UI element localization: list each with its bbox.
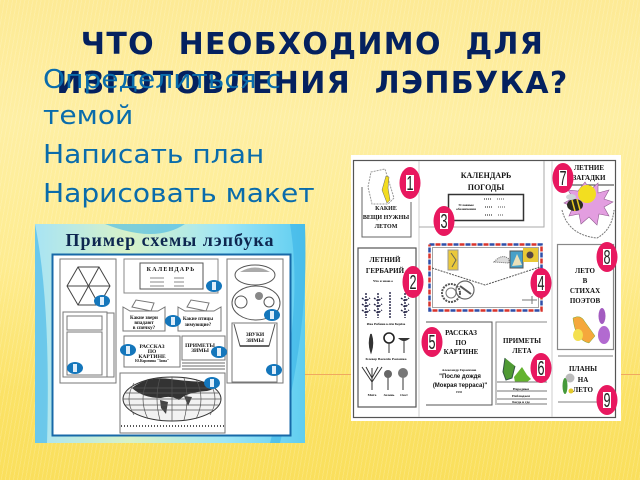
panel: winter signs: ПРИМЕТЫ: [185, 343, 216, 349]
panel: story by picture: (Мокрая терраса)": [433, 383, 487, 389]
number markers: [67, 280, 282, 389]
panel: things needed: ЛЕТОМ: [375, 224, 398, 230]
panel: world map: [120, 373, 225, 433]
panel: signs of summer: Народные: [513, 387, 530, 391]
bullet list: Написать план: [43, 140, 264, 170]
number badges: 2: [410, 272, 416, 294]
panel: summer in verse: ПОЭТОВ: [570, 297, 600, 305]
panel: signs of summer: Наблюдаем: [512, 394, 531, 398]
panel: hexagon and window: [60, 259, 116, 383]
panel: things needed: [362, 169, 411, 237]
bullet list: Определиться с: [43, 65, 281, 95]
panel: pockets: впадают: [134, 321, 154, 326]
panel: pockets: Какие звери: [130, 316, 158, 321]
panel: story: [124, 336, 180, 367]
panel: summer riddles: ЛЕТНИЕ: [574, 164, 604, 172]
panel: herbarium: ГЕРБАРИЙ: [366, 267, 405, 275]
panel: herbarium: Зелень: [384, 393, 395, 397]
panel: story: РАССКАЗ: [139, 344, 165, 350]
panel: story: ПО: [148, 349, 157, 355]
bullet list: темой: [43, 101, 133, 131]
panel: winter signs: ЗИМЫ: [191, 348, 209, 354]
panel: signs of summer: ЛЕТА: [512, 347, 532, 355]
panel: summer plans: ПЛАНЫ: [569, 365, 597, 373]
bullet list: [43, 65, 315, 209]
panel: herbarium: Клевер Василёк Ромашка: [366, 357, 407, 361]
panel: pockets: [123, 300, 221, 331]
panel: story by picture: РАССКАЗ: [445, 329, 477, 337]
panel: weather calendar: [419, 161, 544, 227]
panel: pockets: Какие птицы: [183, 317, 213, 322]
panel: signs of summer: [496, 322, 547, 405]
panel: story by picture: [426, 322, 492, 405]
panel: herbarium: Мята: [368, 393, 377, 397]
panel: snowman and sounds: ЗВУКИ: [246, 332, 265, 338]
number badges: 6: [538, 358, 544, 380]
panel: herbarium: Что я знаю о: [373, 279, 393, 283]
panel: weather calendar: Условные: [458, 203, 474, 207]
panel: signs of summer: Когда и где: [512, 400, 530, 404]
panel: summer plans: НА: [578, 376, 588, 384]
panel: summer plans: ЛЕТО: [573, 386, 594, 394]
panel: story: Ю.Коровина "Зима": [135, 359, 169, 363]
panel: story by picture: 1935: [456, 390, 462, 394]
panel: things needed: ВЕЩИ НУЖНЫ: [363, 215, 409, 221]
number badges: 4: [538, 273, 544, 295]
number badges: 9: [604, 390, 610, 412]
panel: pockets: в спячку?: [133, 326, 156, 331]
panel: story by picture: ПО: [456, 339, 467, 347]
panel: calendar: [124, 259, 218, 293]
panel: things needed: КАКИЕ: [375, 206, 397, 212]
number badges: [400, 163, 618, 415]
panel: herbarium: Осот: [400, 393, 408, 397]
panel: summer riddles: ЗАГАДКИ: [573, 174, 606, 182]
number badges: 5: [428, 332, 436, 354]
panel: summer in verse: В: [583, 277, 588, 285]
panel: snowman and sounds: [227, 259, 283, 383]
heading: scheme example: Пример схемы лэпбука: [66, 230, 274, 250]
panel: envelope: [428, 243, 543, 312]
panel: signs of summer: ПРИМЕТЫ: [503, 337, 541, 345]
panel: weather calendar: обозначения: [456, 207, 476, 211]
bullet list: Нарисовать макет: [43, 179, 315, 209]
panel: summer in verse: СТИХАХ: [570, 287, 600, 295]
panel: story by picture: "После дождя: [439, 374, 481, 380]
number badges: 1: [406, 173, 414, 195]
panel: snowman and sounds: ЗИМЫ: [246, 338, 264, 344]
image: right summer lapbook: [351, 155, 621, 421]
panel: herbarium: [358, 248, 416, 407]
panel: pockets: зимующие?: [185, 323, 212, 328]
panel: summer riddles: [562, 164, 614, 238]
title: ЧТО НЕОБХОДИМО ДЛЯ ИЗГОТОВЛЕНИЯ ЛЭПБУКА?: [56, 27, 569, 101]
scheme sheet: [52, 254, 290, 436]
panel: weather calendar: ПОГОДЫ: [468, 183, 504, 192]
image: left lapbook scheme: [35, 224, 306, 443]
panel: story: КАРТИНЕ: [138, 354, 166, 360]
panel: winter signs: [182, 336, 225, 369]
panel: summer in verse: [558, 244, 614, 350]
panel: summer in verse: ЛЕТО: [575, 267, 596, 275]
number badges: 3: [440, 211, 448, 233]
panel: weather calendar: КАЛЕНДАРЬ: [461, 171, 511, 180]
number badges: 8: [604, 247, 610, 269]
panel: summer plans: [558, 356, 613, 402]
panel: story by picture: Александр Герасимов: [442, 368, 476, 372]
panel: herbarium: ЛЕТНИЙ: [370, 256, 401, 264]
number badges: 7: [560, 168, 566, 190]
panel: story by picture: КАРТИНЕ: [444, 348, 479, 356]
panel: herbarium: Ива Рябина клён Берёза: [367, 322, 406, 326]
panel: calendar: КАЛЕНДАРЬ: [147, 267, 195, 273]
